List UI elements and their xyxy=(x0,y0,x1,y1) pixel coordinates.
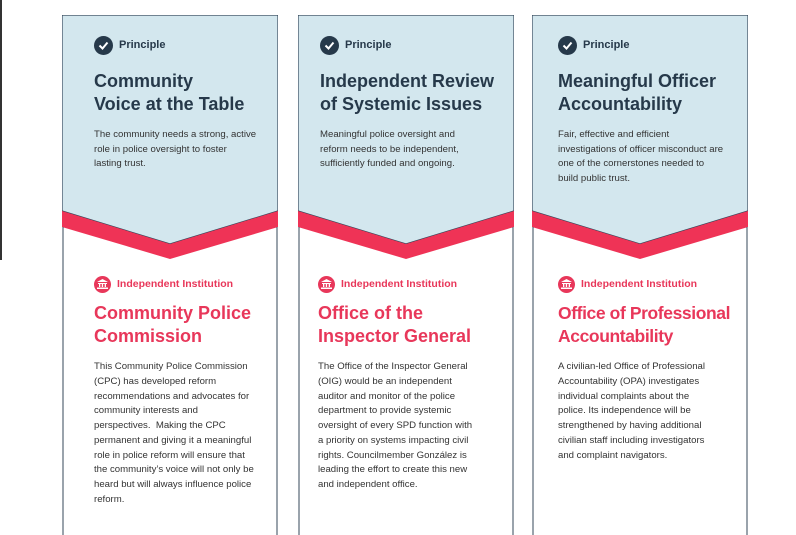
institution text: and complaint navigators. xyxy=(558,450,667,460)
institution text xyxy=(318,361,472,490)
principle text: sufficiently funded and ongoing. xyxy=(320,158,455,169)
institution title: Office of the xyxy=(318,303,423,323)
institution label: Independent Institution xyxy=(581,278,697,290)
institution label xyxy=(558,276,697,293)
principle text: Meaningful police oversight and xyxy=(320,129,455,140)
institution text: and independent office. xyxy=(318,479,418,490)
principle title: Meaningful Officer xyxy=(558,71,716,91)
institution text: perspectives. Making the CPC xyxy=(94,420,226,431)
card 3 xyxy=(532,15,748,535)
institution title: Commission xyxy=(94,326,202,346)
institution title: Office of Professional xyxy=(558,303,730,323)
card 1 xyxy=(62,15,278,535)
principle title: Independent Review xyxy=(320,71,494,91)
principle label xyxy=(320,36,392,55)
institution text: A civilian-led Office of Professional xyxy=(558,361,705,372)
institution text: (OIG) would be an independent xyxy=(318,376,452,387)
institution text: civilian staff including investigators xyxy=(558,435,704,446)
institution label: Independent Institution xyxy=(117,278,233,290)
principle text: investigations of officer misconduct are xyxy=(558,144,723,154)
principle text: lasting trust. xyxy=(94,158,146,169)
institution title xyxy=(94,303,251,346)
institution text: permanent and giving it a meaningful xyxy=(94,435,251,446)
principle text: reform needs to be independent, xyxy=(320,144,459,154)
principle title xyxy=(320,71,494,114)
principle text: Fair, effective and efficient xyxy=(558,129,669,140)
institution title xyxy=(558,303,730,346)
left dark strip xyxy=(0,0,2,260)
principle text: one of the cornerstones needed to xyxy=(558,158,704,169)
institution text xyxy=(94,361,254,505)
principle text xyxy=(320,129,459,169)
institution title xyxy=(318,303,471,346)
principle text: role in police oversight to foster xyxy=(94,144,227,154)
principle title: of Systemic Issues xyxy=(320,94,482,114)
principle title: Voice at the Table xyxy=(94,94,244,114)
institution text: Accountability (OPA) investigates xyxy=(558,376,699,387)
institution text: community interests and xyxy=(94,405,198,416)
institution text xyxy=(558,361,705,460)
institution text: strengthened by having additional xyxy=(558,420,701,431)
principle text xyxy=(558,129,723,184)
institution title: Inspector General xyxy=(318,326,471,346)
principle title: Accountability xyxy=(558,94,682,114)
principle title xyxy=(94,71,244,114)
institution text: oversight of every SPD function with xyxy=(318,420,472,431)
principle label xyxy=(558,36,630,55)
card 2 xyxy=(298,15,514,535)
institution label xyxy=(94,276,233,293)
principle text: build public trust. xyxy=(558,172,630,184)
institution text: auditor and monitor of the police xyxy=(318,390,455,402)
principle label: Principle xyxy=(119,39,165,51)
institution text: reform. xyxy=(94,494,124,505)
institution text: rights. Councilmember González is xyxy=(318,450,467,460)
institution title: Accountability xyxy=(558,326,673,346)
institution text: heard but will always influence police xyxy=(94,479,251,490)
principle text xyxy=(94,129,256,169)
institution label xyxy=(318,276,457,293)
institution text: individual complaints about the xyxy=(558,390,689,402)
principle title xyxy=(558,71,716,114)
principle label: Principle xyxy=(583,39,629,51)
institution text: recommendations and advocates for xyxy=(94,390,249,402)
institution text: leading the effort to create this new xyxy=(318,464,467,475)
principle text: The community needs a strong, active xyxy=(94,129,256,140)
institution text: The Office of the Inspector General xyxy=(318,361,468,372)
institution text: department to provide systemic xyxy=(318,405,451,416)
principle label: Principle xyxy=(345,39,391,51)
institution label: Independent Institution xyxy=(341,278,457,290)
institution text: police. Its independence will be xyxy=(558,405,691,416)
institution text: a priority on systems impacting civil xyxy=(318,435,468,446)
institution text: the community’s voice will not only be xyxy=(94,464,254,475)
principle label xyxy=(94,36,166,55)
institution text: (CPC) has developed reform xyxy=(94,376,216,387)
institution text: This Community Police Commission xyxy=(94,361,248,372)
principle title: Community xyxy=(94,71,193,91)
institution title: Community Police xyxy=(94,303,251,323)
institution text: role in police reform will ensure that xyxy=(94,450,245,460)
